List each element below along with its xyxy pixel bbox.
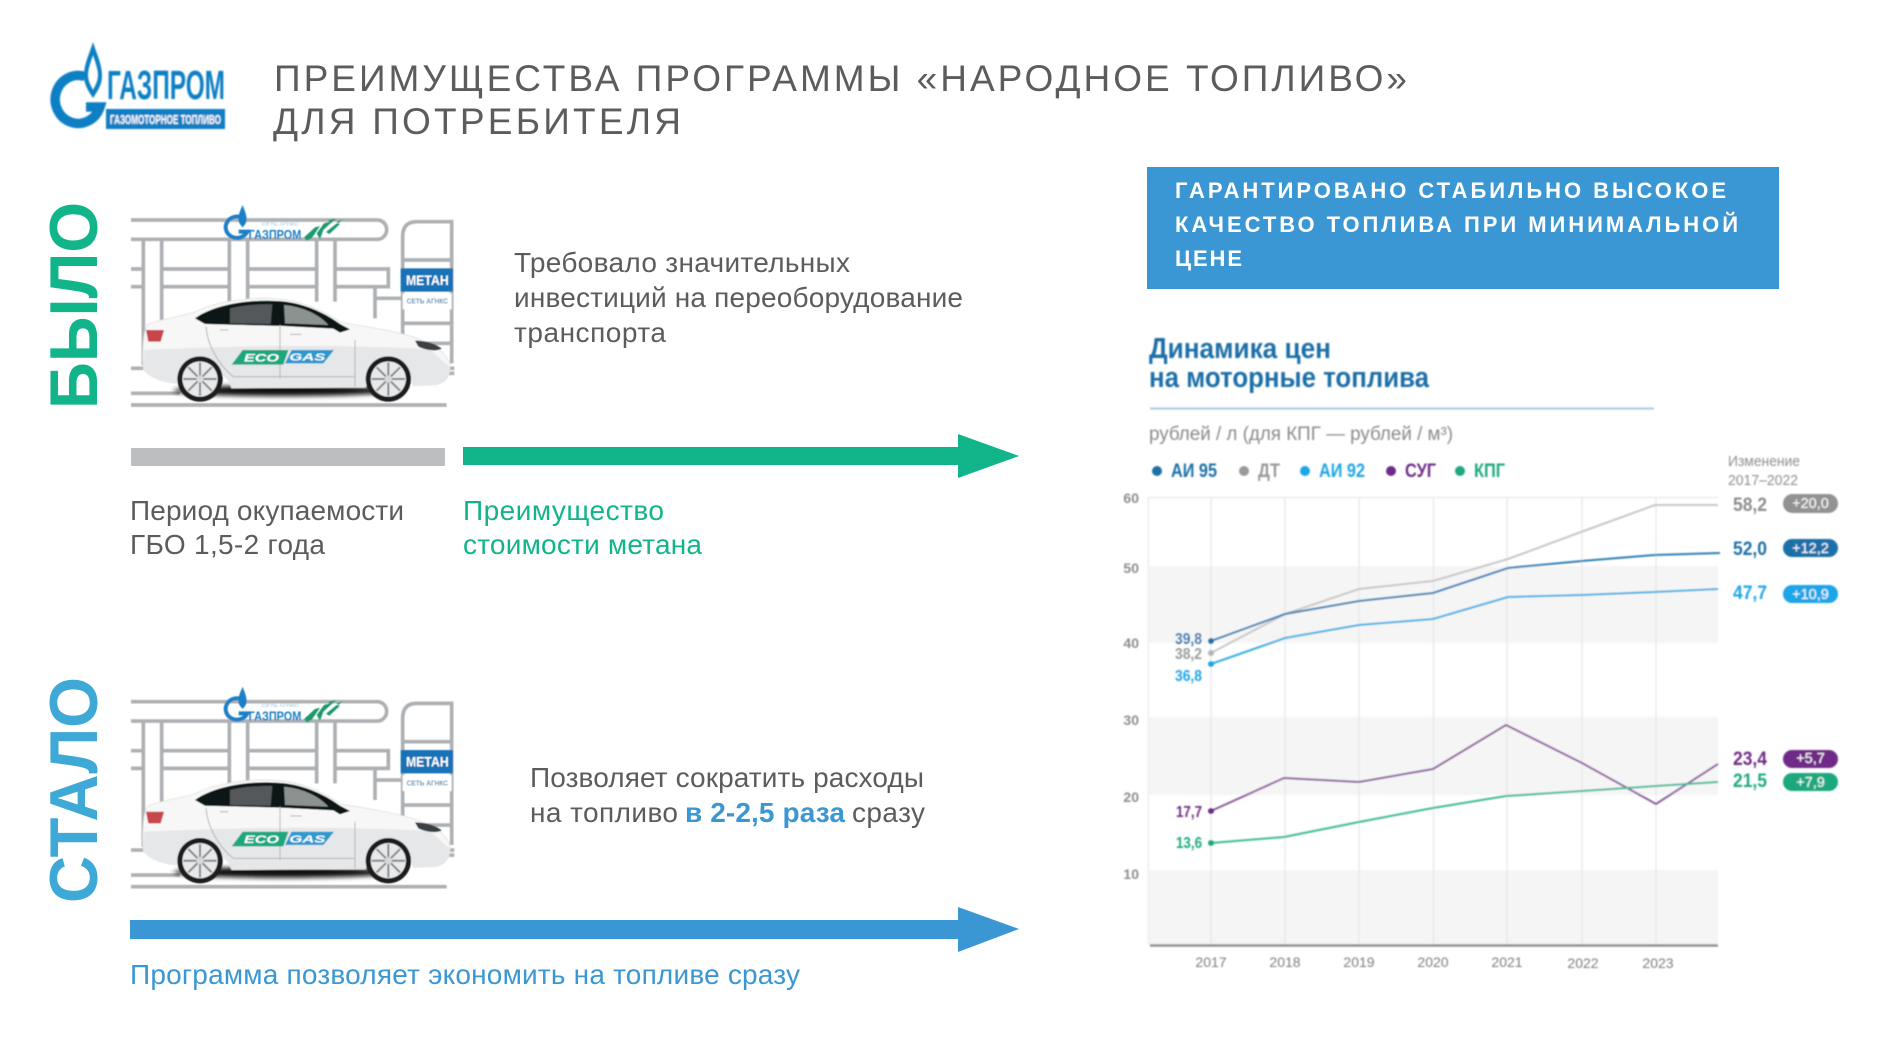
legend (1152, 461, 1505, 482)
tick: 10 (1123, 866, 1139, 882)
start points (1208, 638, 1214, 846)
text: fuel cost reduction (530, 762, 925, 828)
value: 38,2 (1175, 646, 1202, 663)
arrow: green methane advantage (463, 434, 1019, 478)
line: транспорта (514, 317, 666, 348)
change pill: +12,2 (1792, 541, 1829, 557)
y axis labels (1123, 490, 1139, 882)
logo wordmark: ГАЗПРОМ (107, 62, 225, 108)
tick: 30 (1123, 712, 1139, 728)
heading line: на моторные топлива (1149, 362, 1430, 394)
icon: flame (84, 42, 102, 98)
illustration: car at station (было): GAS (289, 353, 325, 364)
heading line: Изменение (1728, 454, 1800, 470)
chart heading (1149, 333, 1430, 394)
tick: 50 (1123, 560, 1139, 576)
year: 2020 (1417, 954, 1449, 970)
plot background (1148, 497, 1718, 946)
value: 23,4 (1733, 749, 1767, 770)
legend item: ДТ (1258, 461, 1280, 482)
change pill: +5,7 (1796, 751, 1825, 767)
callout line: ГАРАНТИРОВАНО СТАБИЛЬНО ВЫСОКОЕ (1175, 178, 1726, 203)
value: 58,2 (1733, 495, 1767, 516)
line: Период окупаемости (130, 495, 404, 526)
illustration: car at station (стало) (131, 687, 454, 887)
title line 2: ДЛЯ ПОТРЕБИТЕЛЯ (273, 101, 681, 142)
tick: 40 (1123, 635, 1139, 651)
line: на топливо (530, 797, 678, 828)
line end: сразу (852, 797, 925, 828)
year: 2023 (1642, 955, 1674, 971)
legend item: АИ 95 (1171, 461, 1217, 482)
year: 2019 (1343, 954, 1375, 970)
highlighted figure: в 2-2,5 раза (685, 797, 845, 828)
change pill: +7,9 (1796, 775, 1825, 791)
tick: 60 (1123, 490, 1139, 506)
line: ГБО 1,5-2 года (130, 529, 325, 560)
value: 17,7 (1176, 804, 1202, 821)
station logo: СЕТЬ АГНКС (262, 703, 299, 709)
illustration: car at station (было): ECO (244, 352, 280, 364)
panel: fuel price chart (1123, 333, 1838, 971)
callout line: КАЧЕСТВО ТОПЛИВА ПРИ МИНИМАЛЬНОЙ (1175, 212, 1738, 237)
line: СУГ (1211, 725, 1718, 811)
section label: было: БЫЛО (36, 202, 112, 409)
legend item: КПГ (1474, 461, 1505, 482)
series lines (1211, 505, 1720, 843)
year: 2018 (1269, 954, 1301, 970)
logo subtitle bar (106, 109, 225, 129)
year: 2021 (1491, 954, 1523, 970)
end values and change pills (1733, 495, 1767, 792)
illustration: car at station (было): МЕТАН (406, 273, 449, 288)
start values (1175, 631, 1202, 852)
chart units: рублей / л (для КПГ — рублей / м³) (1149, 424, 1453, 445)
heading line: 2017–2022 (1728, 473, 1798, 489)
value: 52,0 (1733, 539, 1767, 560)
value: 47,7 (1733, 583, 1767, 604)
change column heading (1728, 454, 1800, 489)
x axis labels (1195, 954, 1674, 971)
line: АИ 92 (1211, 589, 1718, 664)
line: инвестиций на переоборудование (514, 282, 963, 313)
tick: 20 (1123, 789, 1139, 805)
line: Требовало значительных (514, 247, 850, 278)
change pill: +20,0 (1792, 496, 1829, 512)
line: Преимущество (463, 495, 664, 526)
section label: стало: СТАЛО (36, 677, 112, 903)
illustration: car at station (стало): СЕТЬ АГНКС (407, 778, 449, 787)
heading line: Динамика цен (1149, 333, 1331, 365)
text: methane cost advantage (463, 495, 702, 560)
year: 2022 (1567, 955, 1599, 971)
year: 2017 (1195, 954, 1227, 970)
logo subtitle: ГАЗОМОТОРНОЕ ТОПЛИВО (110, 113, 221, 127)
value: 39,8 (1175, 631, 1202, 648)
station logo: СЕТЬ АГНКС (262, 221, 299, 227)
text: program saves immediately: Программа позволяет экономить на топливе сразу (130, 959, 800, 990)
logo: Gazprom motor fuel (55, 42, 225, 129)
icon: G letter (55, 75, 100, 123)
title (273, 58, 1407, 142)
value: 36,8 (1175, 668, 1202, 685)
illustration: car at station (было): СЕТЬ АГНКС (407, 297, 449, 306)
title line 1: ПРЕИМУЩЕСТВА ПРОГРАММЫ «НАРОДНОЕ ТОПЛИВО» (274, 58, 1407, 99)
line: КПГ (1211, 782, 1718, 843)
legend item: СУГ (1405, 461, 1436, 482)
value: 13,6 (1176, 835, 1202, 852)
line: Позволяет сократить расходы (530, 762, 924, 793)
arrow: blue savings (130, 907, 1019, 952)
illustration: car at station (стало): GAS (289, 834, 325, 845)
text: payback period (130, 495, 404, 560)
line: АИ 95 (1211, 553, 1720, 641)
station logo: ГАЗПРОМ (249, 709, 301, 724)
callout line: ЦЕНЕ (1175, 246, 1242, 271)
value: 21,5 (1733, 771, 1767, 792)
illustration: car at station (стало): ECO (244, 834, 280, 846)
line: стоимости метана (463, 529, 702, 560)
illustration: car at station (было) (131, 205, 454, 405)
grey payback bar (131, 448, 445, 466)
station logo (226, 687, 343, 724)
station logo: ГАЗПРОМ (249, 227, 301, 242)
line: ДТ (1211, 505, 1718, 653)
change pill: +10,9 (1792, 587, 1829, 603)
callout: guaranteed quality (1147, 167, 1779, 289)
station logo (226, 205, 343, 242)
illustration: car at station (стало): МЕТАН (406, 755, 449, 770)
text: investments required (514, 247, 963, 348)
legend item: АИ 92 (1319, 461, 1365, 482)
